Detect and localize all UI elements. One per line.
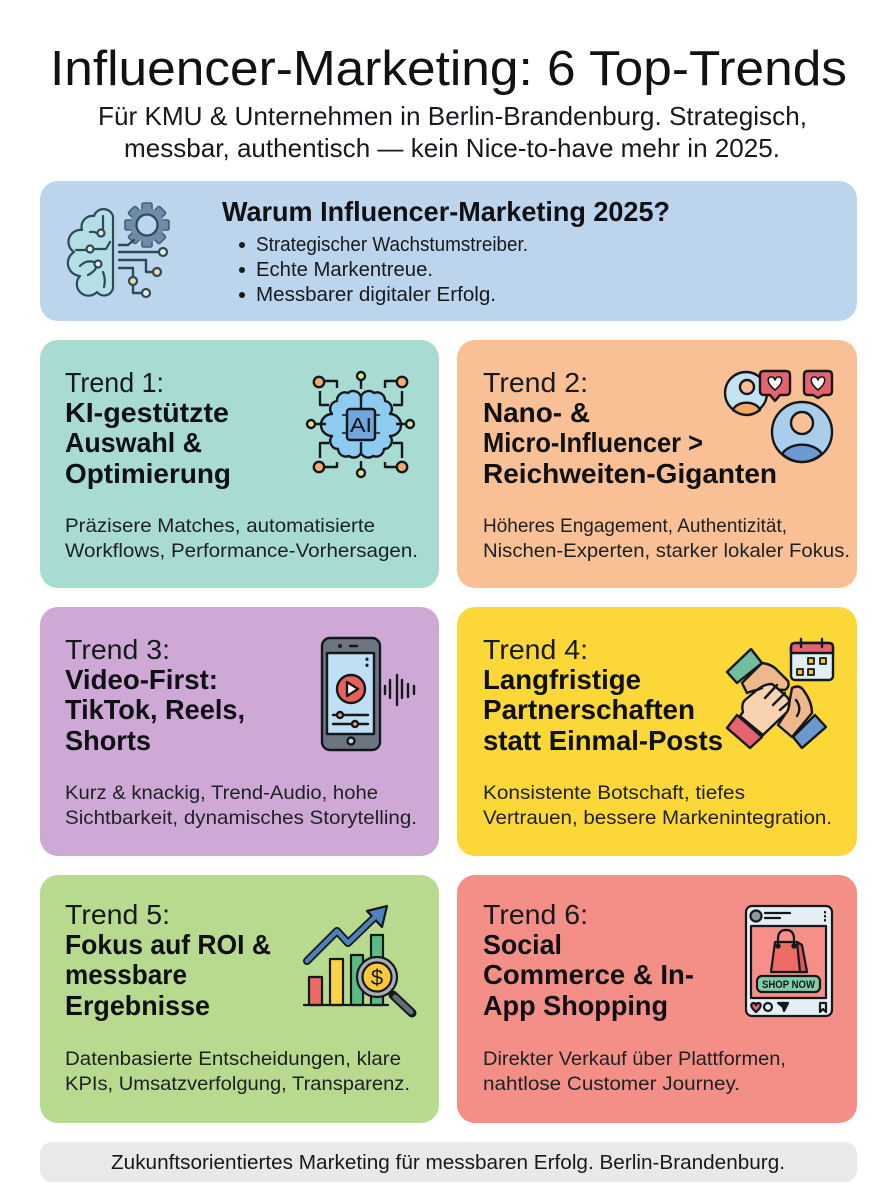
panel: warum [40, 181, 857, 321]
icon: growth chart with magnifier: $ [371, 965, 383, 990]
description: trend 3: Sichtbarkeit, dynamisches Storytelling. [65, 807, 417, 829]
heading: trend 3: Trend 3: [65, 634, 170, 665]
heading: trend 5: Trend 5: [65, 899, 170, 930]
heading: trend 6: App Shopping [483, 990, 668, 1021]
icon: influencer avatars with hearts [725, 371, 832, 462]
heading: trend 5 [65, 899, 271, 1021]
bullet list: Strategischer Wachstumstreiber. [256, 234, 528, 256]
icon: AI brain: AI [350, 415, 372, 437]
heading: trend 4: Langfristige [483, 664, 641, 695]
heading: trend 6: Trend 6: [483, 899, 588, 930]
description: trend 4: Konsistente Botschaft, tiefes [483, 782, 745, 804]
description: trend 5 [65, 1048, 410, 1095]
panel: trend 3 [40, 607, 439, 856]
footer: Zukunftsorientiertes Marketing für messbaren Erfolg. Berlin-Brandenburg. [111, 1152, 785, 1174]
footer [40, 1142, 857, 1182]
heading: trend 4: statt Einmal-Posts [483, 725, 723, 756]
heading: trend 1 [65, 367, 231, 489]
heading: trend 2: Nano- & [483, 397, 590, 428]
heading: trend 3: Shorts [65, 725, 151, 756]
icon: social post with shop now [746, 906, 832, 1016]
description: trend 5: Datenbasierte Entscheidungen, klare [65, 1048, 401, 1070]
heading: trend 5: Fokus auf ROI & [65, 929, 271, 960]
heading: trend 2: Trend 2: [483, 367, 588, 398]
bullet list: Echte Markentreue. [256, 259, 433, 281]
panel: trend 1 [40, 340, 439, 588]
description: trend 2: Höheres Engagement, Authentizität, [483, 515, 787, 537]
heading: trend 4 [483, 634, 723, 756]
description: trend 2: Nischen-Experten, starker lokaler Fokus. [483, 540, 850, 562]
heading: trend 6 [483, 899, 694, 1021]
panel: trend 5 [40, 875, 439, 1123]
bullet list: Messbarer digitaler Erfolg. [256, 284, 496, 306]
icon: joined hands with calendar [727, 639, 833, 748]
heading: trend 2 [483, 367, 777, 489]
heading: trend 2: Reichweiten-Giganten [483, 458, 777, 489]
subtitle [98, 101, 807, 163]
icon: AI brain [307, 372, 414, 477]
heading: trend 6: Commerce & In- [483, 959, 694, 990]
description: trend 6: Direkter Verkauf über Plattformen, [483, 1048, 786, 1070]
description: trend 3: Kurz & knackig, Trend-Audio, hohe [65, 782, 378, 804]
panel: trend 4 [457, 607, 857, 856]
heading: trend 3: Video-First: [65, 664, 218, 695]
description: trend 3 [65, 782, 417, 829]
description: trend 1: Präzisere Matches, automatisierte [65, 515, 375, 537]
heading: trend 4: Partnerschaften [483, 694, 695, 725]
heading: trend 1: Auswahl & [65, 427, 202, 458]
heading: trend 6: Social [483, 929, 562, 960]
description: trend 4: Vertrauen, bessere Markenintegration. [483, 807, 832, 829]
icon: growth chart with magnifier [304, 906, 412, 1013]
description: trend 4 [483, 782, 832, 829]
heading: trend 5: Ergebnisse [65, 990, 210, 1021]
heading: trend 1: KI-gestützte [65, 397, 229, 428]
description: trend 2 [483, 515, 850, 562]
title: Influencer-Marketing: 6 Top-Trends [50, 42, 847, 96]
description: trend 1: Workflows, Performance-Vorhersagen. [65, 540, 418, 562]
panel: trend 6 [457, 875, 857, 1123]
heading: trend 1: Trend 1: [65, 367, 164, 398]
icon: social post with shop now: SHOP NOW [762, 979, 816, 991]
description: trend 6: nahtlose Customer Journey. [483, 1073, 740, 1095]
heading: trend 3 [65, 634, 245, 756]
subtitle: Für KMU & Unternehmen in Berlin-Brandenburg. Strategisch, [98, 101, 807, 131]
icon: smartphone with video [322, 638, 414, 750]
heading: trend 2: Micro-Influencer > [483, 427, 703, 458]
panel: trend 2 [457, 340, 857, 588]
heading: trend 3: TikTok, Reels, [65, 694, 245, 725]
bullet list [239, 234, 528, 306]
heading: trend 1: Optimierung [65, 458, 231, 489]
heading: trend 5: messbare [65, 959, 187, 990]
description: trend 6 [483, 1048, 786, 1095]
subtitle: messbar, authentisch — kein Nice-to-have mehr in 2025. [124, 133, 780, 163]
icon: brain with gear [68, 203, 169, 297]
description: trend 1 [65, 515, 418, 562]
description: trend 5: KPIs, Umsatzverfolgung, Transparenz. [65, 1073, 410, 1095]
heading: warum: Warum Influencer-Marketing 2025? [222, 196, 670, 227]
heading: trend 4: Trend 4: [483, 634, 588, 665]
